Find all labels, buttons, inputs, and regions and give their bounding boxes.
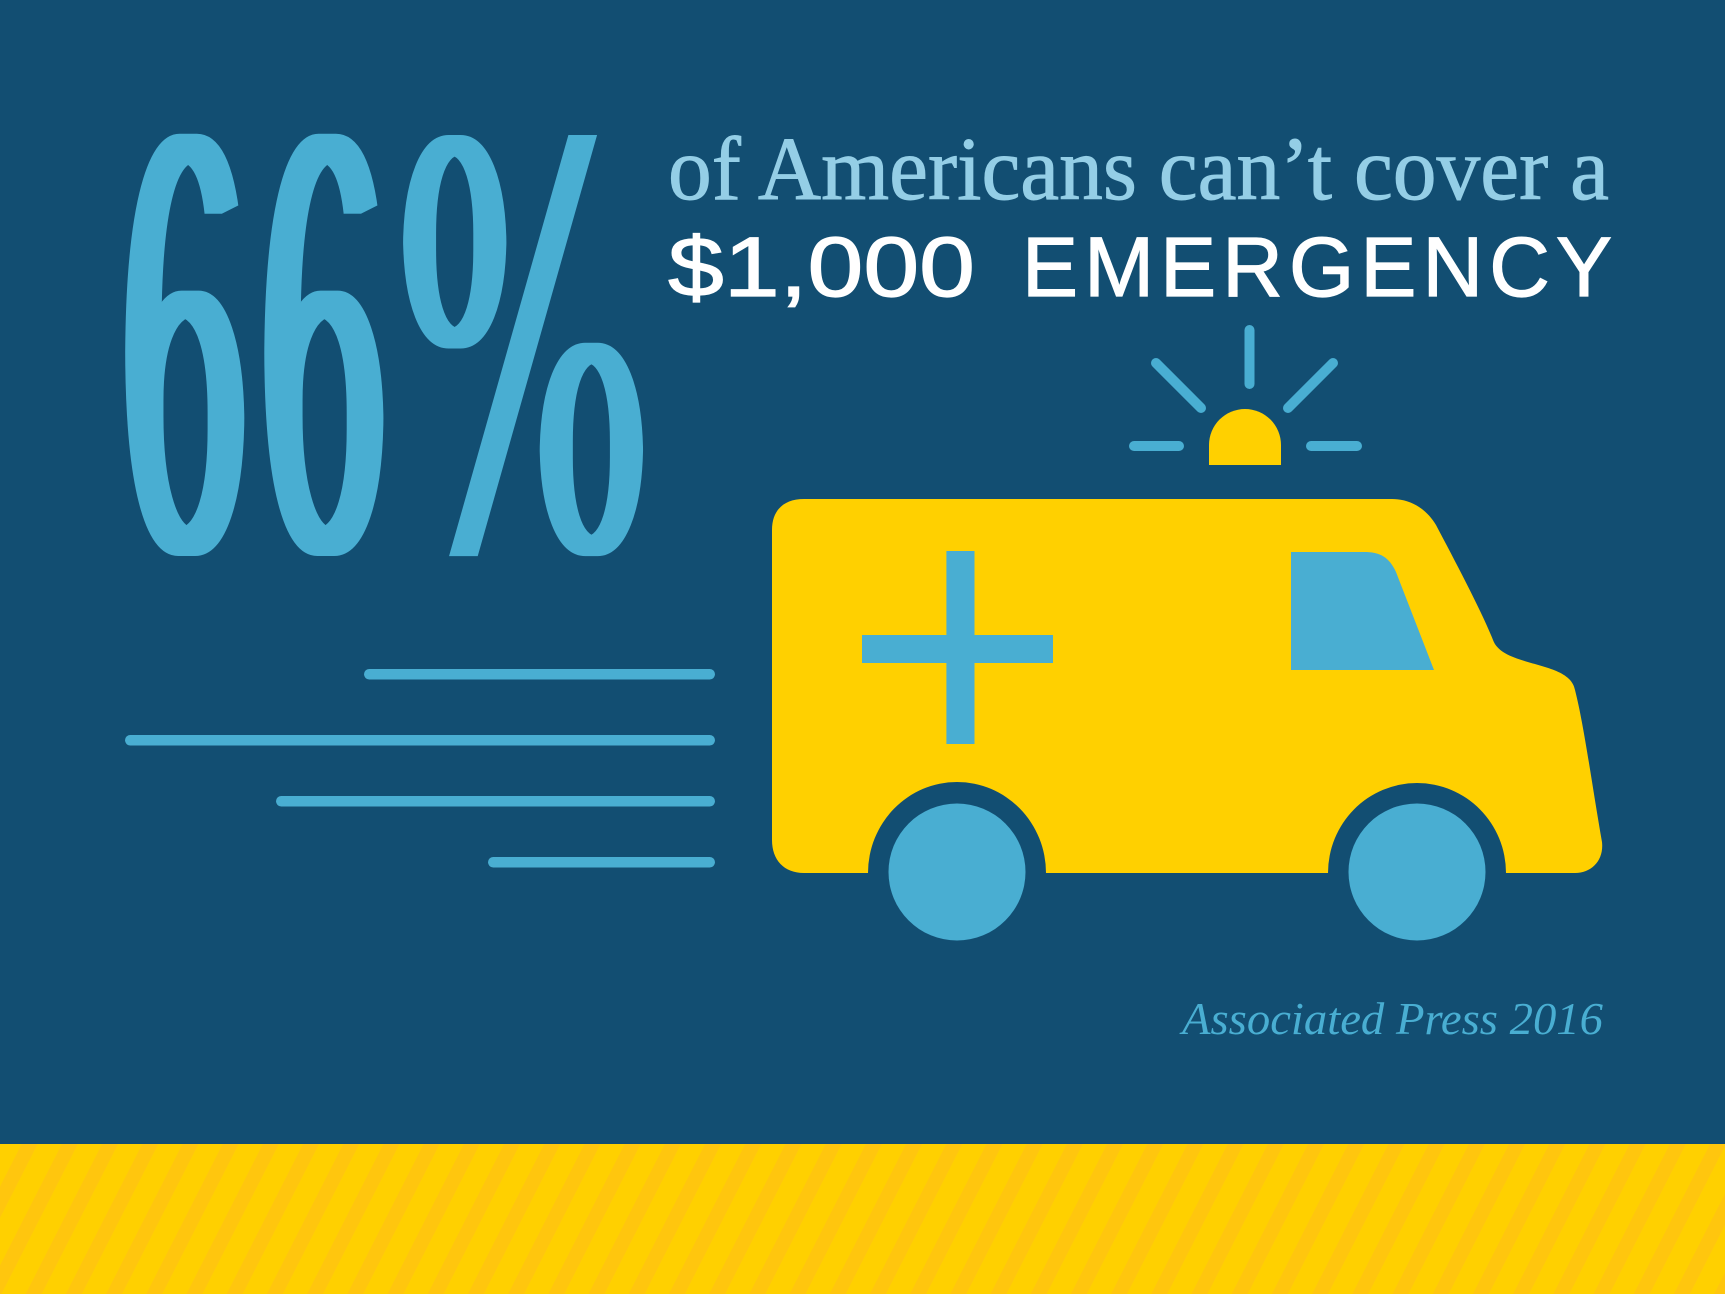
source citation: Associated Press 2016 xyxy=(1179,993,1603,1044)
rear wheel xyxy=(888,804,1026,940)
emergency word: EMERGENCY xyxy=(1022,220,1612,314)
front wheel xyxy=(1348,804,1486,940)
icon: siren with light rays xyxy=(1134,330,1357,465)
siren rays xyxy=(1134,330,1357,446)
siren dome xyxy=(1209,409,1281,465)
window xyxy=(1291,552,1434,670)
headline line 2 xyxy=(668,220,1612,314)
medical cross xyxy=(862,551,1053,744)
icon: ambulance xyxy=(772,499,1602,940)
digits 66: 6 xyxy=(262,0,385,690)
big statistic: 66% xyxy=(122,0,652,693)
digits 66 xyxy=(122,0,385,690)
amount: $1,000 xyxy=(668,220,975,314)
percent sign: % xyxy=(394,20,652,693)
footer striped band xyxy=(0,1144,1725,1294)
ambulance body xyxy=(772,499,1602,873)
speed lines xyxy=(125,669,715,868)
headline line 1: of Americans can’t cover a xyxy=(668,120,1609,219)
digits 66: 6 xyxy=(122,0,246,690)
